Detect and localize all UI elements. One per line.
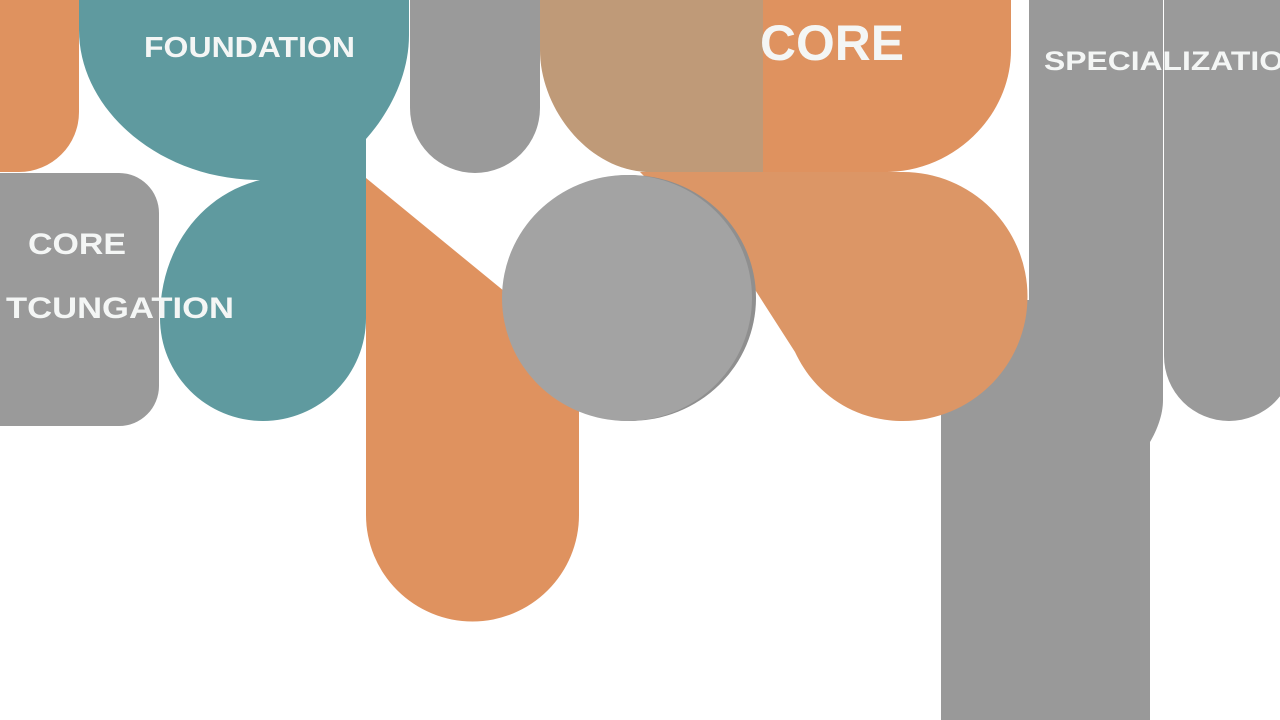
shape: tan core half	[540, 0, 763, 172]
shape: gray right pill	[1164, 0, 1280, 421]
shape: teal foundation blob	[79, 0, 409, 421]
shape: orange lower pill with slanted top	[366, 178, 579, 622]
shape: gray top pill	[410, 0, 540, 173]
shape: orange teardrop	[640, 172, 1028, 421]
label: core secondary: CORE	[28, 228, 126, 261]
label: tcungation: TCUNGATION	[6, 292, 234, 325]
shape: gray circle	[502, 175, 752, 421]
shape: orange core half	[763, 0, 1011, 172]
shape: gray tall column upper	[1029, 0, 1163, 442]
shape: gray rounded block	[0, 173, 159, 426]
shape: orange top-left block	[0, 0, 79, 172]
shape: gray tall column lower	[941, 300, 1150, 720]
label: foundation: FOUNDATION	[144, 32, 355, 64]
shape: gray circle shadow edge	[504, 175, 756, 421]
label: specialization: SPECIALIZATIO	[1044, 46, 1280, 76]
label: core heading: CORE	[760, 15, 904, 71]
